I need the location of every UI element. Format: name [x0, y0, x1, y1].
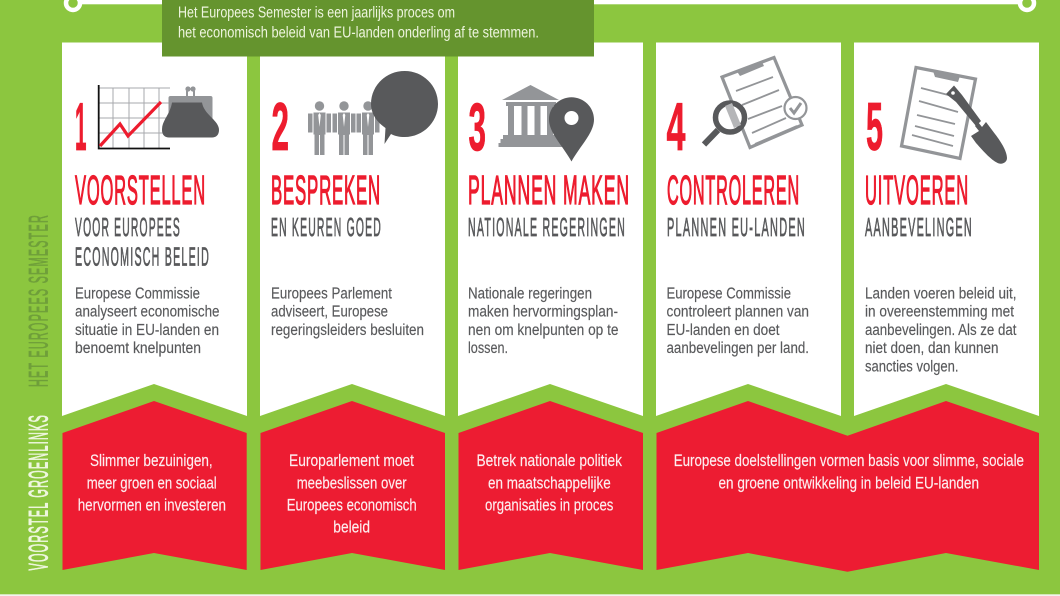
body text: Europese Commissie: [75, 286, 200, 302]
proposal 1: hervormen en investeren: [78, 496, 226, 514]
proposal 2: [260, 401, 445, 570]
proposal 2: meebeslissen over: [297, 474, 407, 492]
icon: magnifying glass: [704, 103, 744, 144]
proposal 4 and 5 merged: [656, 401, 1039, 572]
number 4: 4: [666, 89, 686, 165]
icon: government building: [498, 85, 564, 147]
panel: step 2 white: [260, 42, 445, 416]
body text: Landen voeren beleid uit,: [865, 286, 1016, 302]
panel: step 1 white: [62, 42, 247, 416]
icon: speech bubble: [371, 71, 438, 144]
proposal 1: meer groen en sociaal: [87, 474, 217, 492]
body text: maken hervormingsplan-: [468, 304, 618, 321]
body text: EU-landen en doet: [666, 322, 780, 339]
body text: sancties volgen.: [865, 358, 958, 376]
body text: [468, 286, 618, 357]
body text: Nationale regeringen: [468, 286, 592, 302]
step 5 content: 5: [866, 89, 883, 165]
intro banner: [162, 0, 594, 56]
body text: in overeenstemming met: [865, 304, 1015, 321]
proposal 2: Europarlement moet: [289, 452, 414, 470]
body text: [865, 286, 1017, 376]
step 2 content: 2: [272, 89, 289, 165]
body text: situatie in EU-landen en: [75, 322, 219, 339]
icon: line chart: [99, 85, 170, 148]
text: VOORSTELLEN: [75, 167, 206, 213]
body text: analyseert economische: [75, 304, 220, 321]
intro banner: het economisch beleid van EU-landen onderling af te stemmen.: [178, 24, 539, 42]
step 2 content: EN KEUREN GOED: [271, 212, 382, 242]
panel: step 3 white: [458, 42, 643, 416]
text: PLANNEN EU-LANDEN: [667, 212, 806, 242]
body text: nen om knelpunten op te: [468, 322, 618, 339]
body text: aanbevelingen. Als ze dat: [865, 322, 1017, 339]
panel: step 5 white: [854, 42, 1039, 416]
subheading: VOOR EUROPEES: [75, 212, 181, 242]
timeline bar with end circles: [66, 0, 1034, 10]
step 5 content: [865, 68, 1017, 376]
body text: aanbevelingen per land.: [666, 340, 809, 357]
body text: controleert plannen van: [666, 304, 809, 321]
step 3 content: 3: [468, 89, 486, 165]
text: NATIONALE REGERINGEN: [468, 212, 626, 242]
body text: [666, 286, 809, 357]
step 2 content: [271, 71, 438, 339]
step 1 content: [75, 85, 220, 357]
proposal 2: beleid: [333, 518, 370, 536]
icon: clipboard: [902, 68, 976, 158]
proposal 1: Slimmer bezuinigen,: [90, 452, 213, 470]
icon: clipboard with check: [722, 58, 806, 148]
proposal 3: en maatschappelijke: [488, 474, 611, 492]
panel: step 4 white: [656, 42, 841, 416]
body text: Europees Parlement: [271, 286, 393, 302]
body text: lossen.: [468, 340, 508, 357]
subheading: [75, 212, 210, 272]
body text: Europese Commissie: [666, 286, 791, 302]
body text: [271, 286, 424, 339]
step 1 content: 1: [75, 89, 86, 165]
step 4 content: [666, 58, 809, 357]
icon: shovel: [946, 86, 1007, 164]
proposal 2: Europees economisch: [287, 496, 417, 514]
proposal 4 and 5 merged: en groene ontwikkeling in beleid EU-landen: [718, 474, 979, 492]
body text: benoemt knelpunten: [75, 340, 201, 357]
body text: [75, 286, 220, 357]
body text: regeringsleiders besluiten: [271, 322, 424, 339]
body text: niet doen, dan kunnen: [865, 340, 998, 357]
text: CONTROLEREN: [667, 167, 800, 213]
step 2 content: BESPREKEN: [271, 167, 381, 213]
proposal 3: Betrek nationale politiek: [476, 452, 623, 470]
text: PLANNEN MAKEN: [468, 167, 630, 213]
body text: adviseert, Europese: [271, 304, 388, 321]
proposal 3: organisaties in proces: [485, 496, 613, 514]
step 3 content: [468, 85, 630, 357]
text: VOORSTEL GROENLINKS: [24, 414, 54, 570]
text: ECONOMISCH BELEID: [75, 242, 210, 272]
proposal 1: [62, 401, 247, 570]
icon: three people: [308, 101, 380, 155]
icon: map pin: [549, 97, 594, 162]
proposal 3: [458, 401, 643, 570]
intro banner: Het Europees Semester is een jaarlijks proces om: [178, 4, 455, 21]
icon: purse: [162, 86, 219, 138]
